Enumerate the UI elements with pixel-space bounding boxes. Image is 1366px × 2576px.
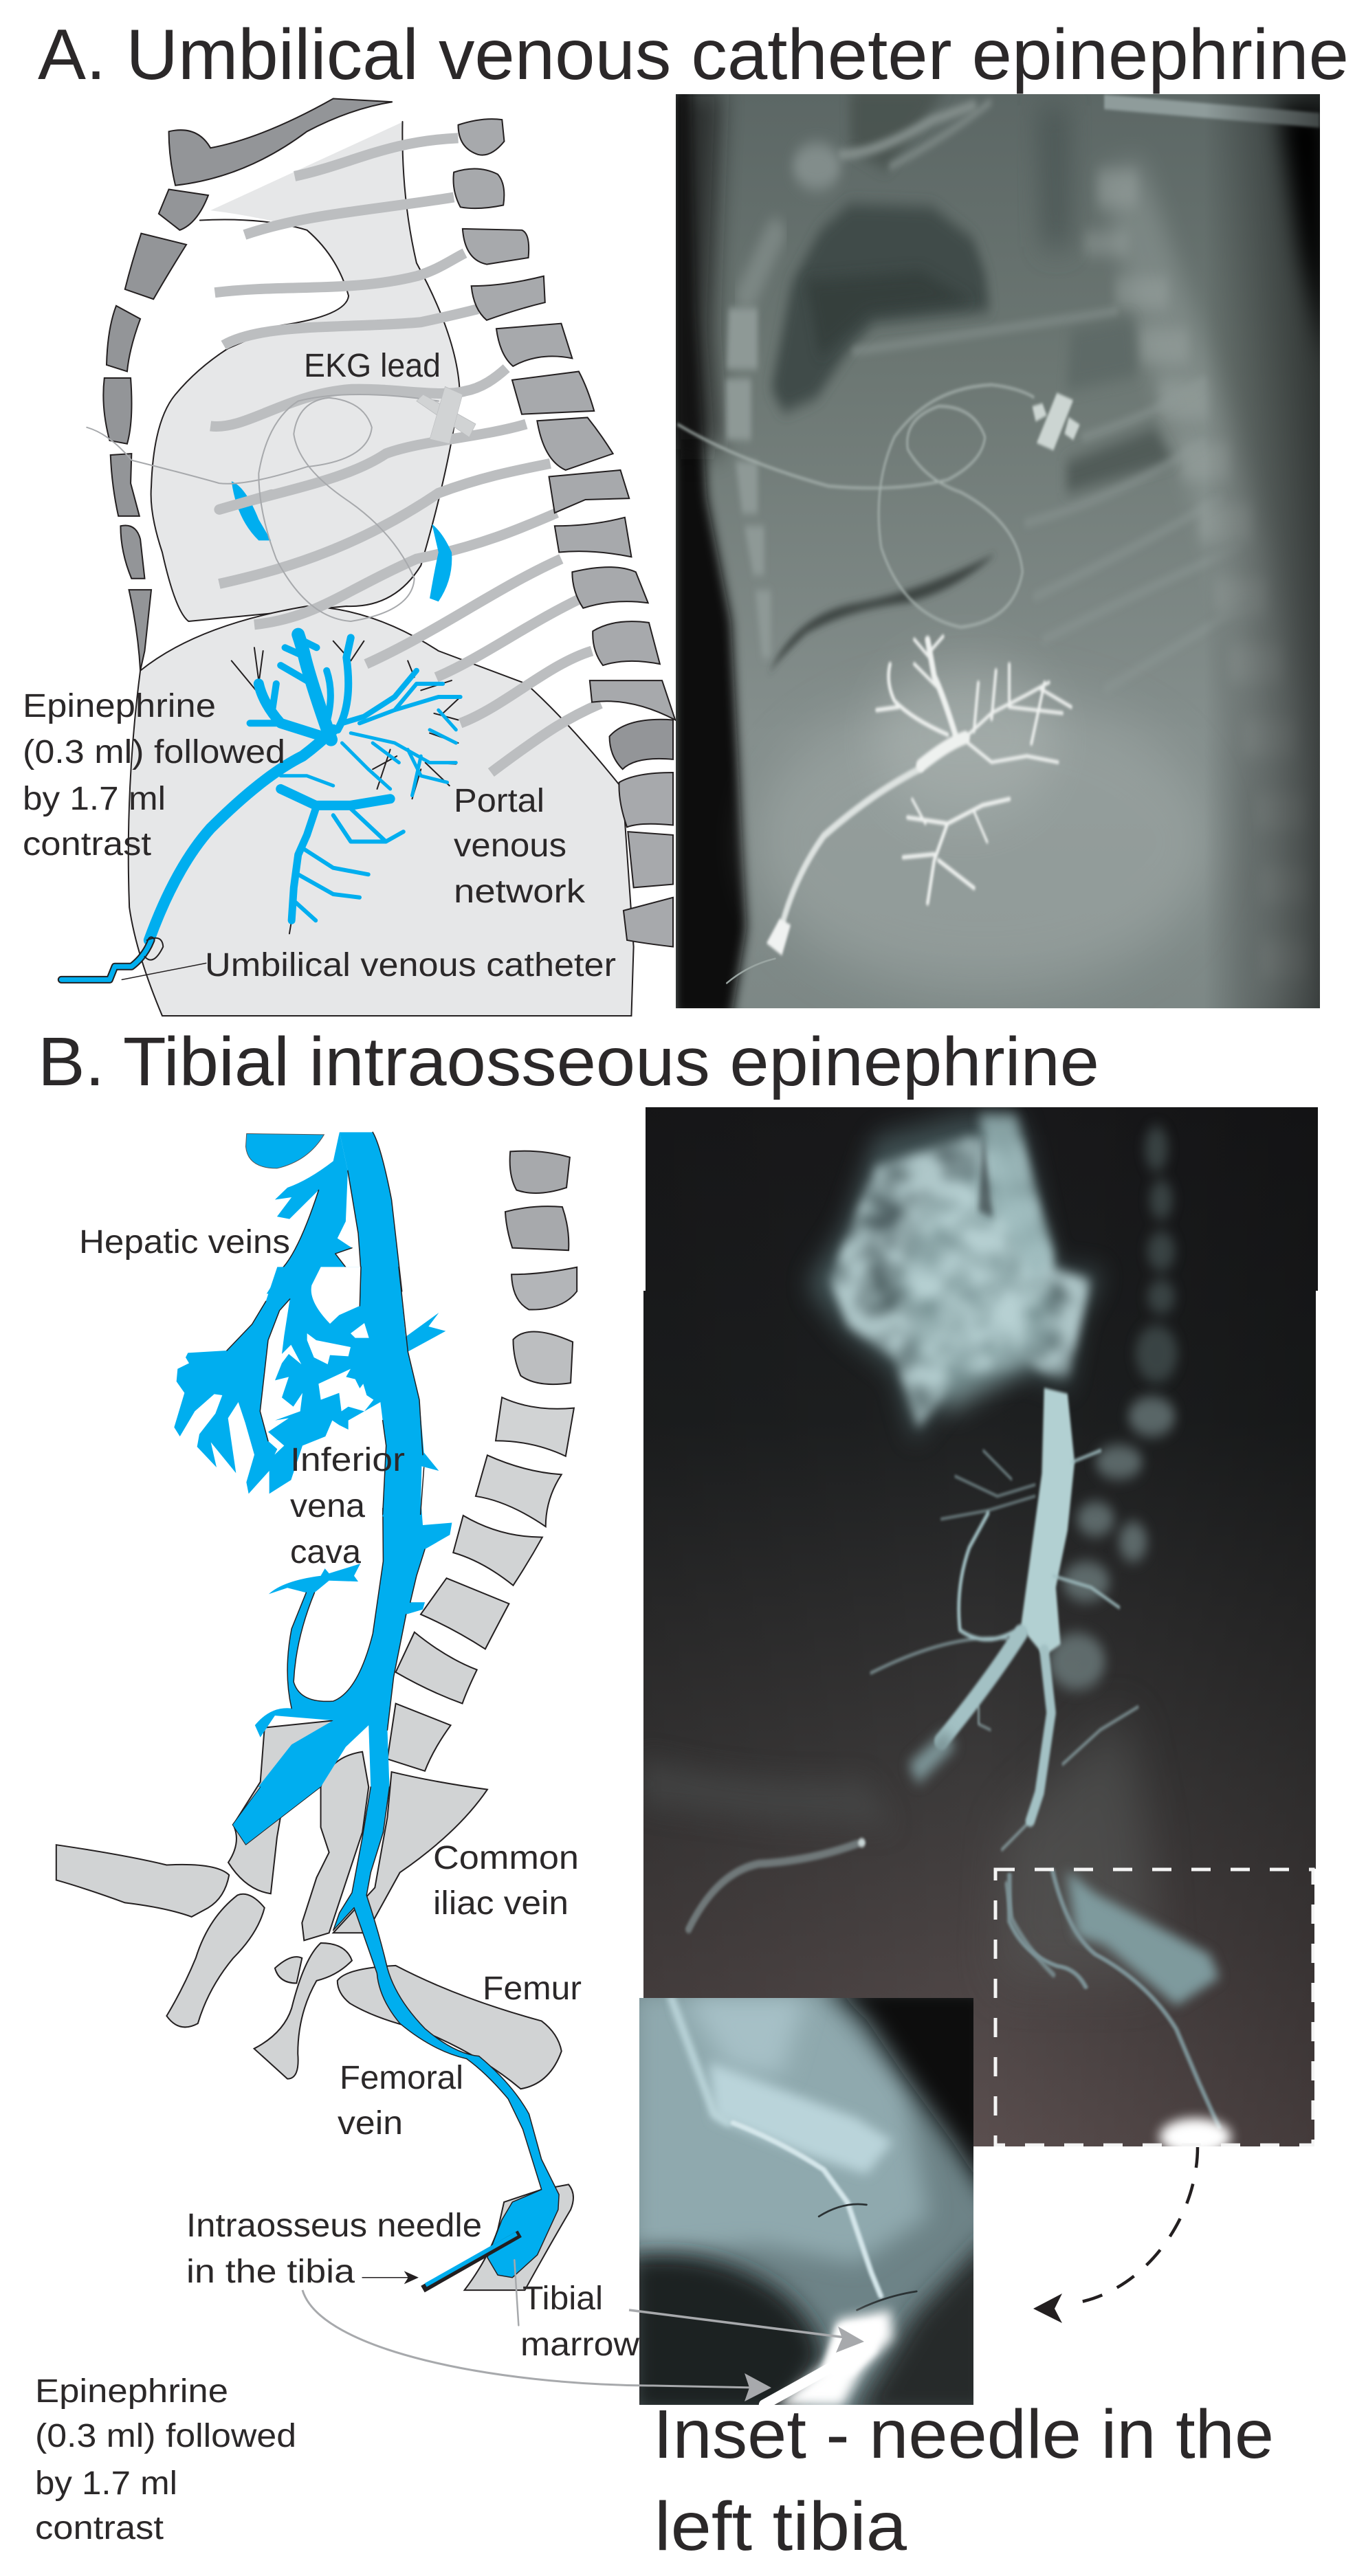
left iliac vein [232,1787,321,1845]
arrow: tibial marrow to inset [629,2310,864,2353]
label: portal venous network [454,783,586,910]
right edge vignette [1279,106,1327,364]
labels: section B diagram [35,1224,639,2546]
dashed inset frame [995,1869,1313,2145]
outlines of the vena cava [283,1132,425,1730]
label: femoral vein: Femoral [340,2060,463,2096]
label: inferior vena cava: vena [290,1488,365,1524]
thorax outline [151,122,459,621]
label: epinephrine dose B: contrast [35,2510,164,2546]
thigh on film [1067,1870,1219,2006]
IVC on film [1021,1388,1075,1656]
title: section B: B. Tibial intraosseous epinephrine [38,1023,1099,1100]
liver cloud [806,1114,1105,1439]
EKG wire on film [678,385,1033,628]
left iliac vein outline [232,1787,321,1845]
contrast in catheter [780,768,921,934]
label: epinephrine dose: Epinephrine [23,688,216,724]
label: umbilical venous catheter: Umbilical venous catheter [205,947,616,984]
heart chambers in blue [232,481,452,601]
lung air [771,203,990,412]
label: intraosseus needle [186,2208,482,2290]
label: epinephrine dose B: (0.3 ml) followed [35,2418,296,2454]
dark mediastinal column [1036,106,1073,247]
right iliac and femoral vein [333,1786,559,2278]
label: epinephrine dose B [35,2373,296,2546]
umbilical venous catheter [61,938,206,979]
leg vessels on film [689,1844,857,1929]
upper hepatic trunk [267,1132,352,1293]
branches on film [871,1451,1138,1850]
blue vessels [149,634,461,940]
lighter lower belly [753,695,1212,989]
label: epinephrine dose: by 1.7 ml [23,781,166,817]
inset x-ray [628,1982,995,2418]
caption: inset [653,2396,1274,2565]
label: femur: Femur [483,1970,582,2007]
intraosseous needle [423,2234,520,2289]
label: femoral vein [338,2060,463,2142]
top-right bar [1104,95,1320,128]
label: epinephrine dose: contrast [23,826,151,863]
central gap [318,1369,373,1411]
fine dark branch tips [232,641,461,933]
label: tibial marrow: marrow [520,2327,639,2363]
label: epinephrine dose B: by 1.7 ml [35,2465,177,2502]
gap under branch [307,1333,351,1364]
title: section A: A. Umbilical venous catheter epinephrine [38,15,1349,95]
label: portal venous network: network [454,874,586,910]
label: epinephrine dose: (0.3 ml) followed [23,734,285,770]
inset dark lower left [628,2254,824,2418]
left black band [674,87,747,1020]
bright needle site [1160,2118,1231,2155]
rib over chamber [219,494,272,509]
label: tibial marrow: Tibial [522,2280,603,2317]
sternum [103,98,393,671]
upper inferior vena cava [340,1132,402,1301]
edge lines [227,1267,424,1514]
label: epinephrine dose [23,688,285,863]
spine vertebrae [505,1151,577,1384]
gap between hepatic veins [260,1299,302,1455]
vertebrae [453,119,675,947]
x-ray A [674,87,1327,1020]
label: portal venous network: Portal [454,783,544,819]
label: inferior vena cava: Inferior [290,1442,405,1478]
EKG pad on film [1032,392,1080,450]
tibial marrow leader [514,2260,518,2325]
EKG lead pad [417,386,476,444]
hepatic veins and mid vena cava [174,1267,445,1517]
label: intraosseus needle: Intraosseus needle [186,2208,482,2244]
label: common iliac vein: iliac vein [433,1885,569,1922]
rib shadows [855,311,1248,689]
label: femoral vein: vein [338,2105,403,2142]
thorax soft tissue [151,122,459,621]
arrow: dashed, frame to inset [1033,2147,1198,2323]
arrow to needle [362,2271,419,2284]
labels: section A diagram [23,348,616,984]
panel: section B diagram, upper [245,1132,577,1787]
inset dark lower right [852,2230,995,2418]
x-ray B [639,1107,1320,2155]
inset white blaze [776,2310,893,2406]
spine lumps [1083,168,1246,673]
gap beside vena cava [311,1267,361,1324]
arrow: needle to inset [302,2290,771,2401]
label: inferior vena cava: cava [290,1534,361,1570]
clavicle [747,102,990,296]
label: common iliac vein: Common [433,1840,579,1876]
label: inferior vena cava [290,1442,405,1570]
contrast glow [872,658,1058,817]
caption: inset: left tibia [654,2488,907,2565]
panel: section A diagram [61,98,675,1016]
EKG wire [87,395,439,621]
label: common iliac vein [433,1840,579,1922]
spine shadows [1136,1126,1178,1382]
ribs [210,138,601,773]
soft tissue glow [998,1713,1156,1979]
portal venous tree [149,634,461,940]
blue silhouette [174,1267,445,1517]
caption: inset: Inset - needle in the [653,2396,1274,2473]
lower inferior vena cava with tributaries [255,1508,452,1787]
label: epinephrine dose B: Epinephrine [35,2373,228,2410]
label: intraosseus needle: in the tibia [186,2254,355,2290]
panel: section B diagram, lower [232,1786,559,2325]
spine band [1103,159,1270,644]
pelvic and leg bones [56,1720,573,2290]
contrast in portal tree [877,636,1071,903]
liver [129,606,634,1016]
femoral vein outline [333,1787,559,2278]
inset bright tissue [633,1992,929,2263]
inset film arc marks [819,2204,916,2310]
label: portal venous network: venous [454,828,566,864]
label: tibial marrow [520,2280,639,2363]
label: hepatic veins: Hepatic veins [79,1224,290,1261]
label: EKG lead: EKG lead [304,348,441,384]
dark notch above clavicle [848,94,942,170]
inset dark corner [828,1982,995,2207]
hepatic vein crescent [245,1133,324,1168]
sternum segments [726,308,771,658]
small triangular gap [351,1323,369,1338]
diaphragm shadow [769,553,996,674]
